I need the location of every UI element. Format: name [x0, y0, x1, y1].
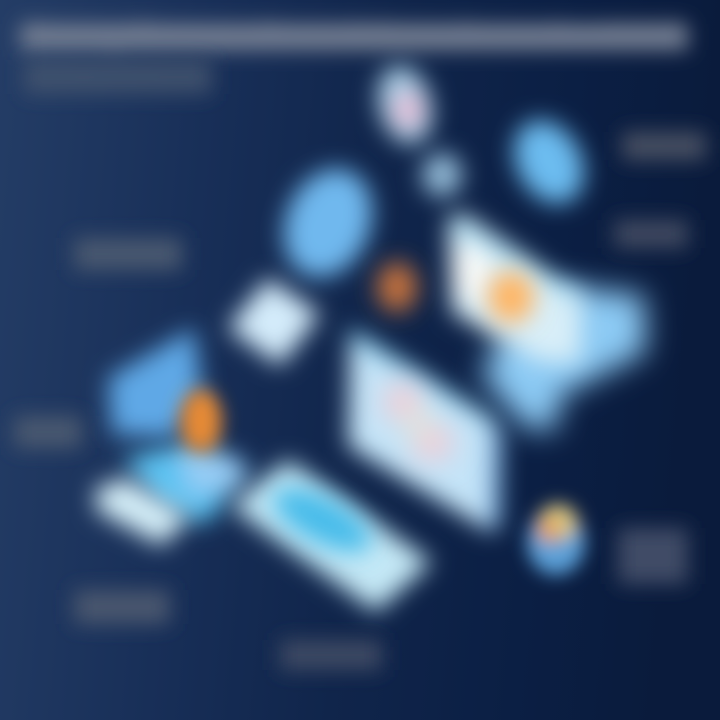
- icon: white rounded square: [228, 278, 320, 366]
- subtitle: Key security factors: [24, 70, 212, 91]
- label: upper right top: [622, 132, 706, 160]
- tablet chart marks: [386, 384, 451, 459]
- label: upper left: [74, 238, 182, 270]
- label: upper right bottom: Controls: [614, 224, 688, 244]
- label: left middle: Security: [14, 421, 82, 442]
- icon: bottom keyboard panel: [230, 460, 432, 612]
- panel: central tablet: [348, 328, 502, 534]
- label: right lower: Data: [618, 537, 689, 556]
- icon: blue leaf left: [108, 328, 202, 438]
- keyboard cyan centre: [264, 475, 380, 565]
- label: left middle: [14, 416, 82, 448]
- icon: orange dot: [377, 262, 417, 312]
- laptop orange mark: [488, 271, 534, 323]
- icon: large blue ellipse: [268, 155, 388, 291]
- icon: laptop upper right: [448, 214, 646, 430]
- laptop body: [124, 440, 250, 524]
- label: upper left: Regulations: [74, 243, 182, 264]
- label: right lower: Privacy: [618, 559, 689, 578]
- label: bottom centre: [280, 640, 382, 670]
- laptop screen: [448, 214, 582, 362]
- title: Compliance Considerations in AWS: [20, 16, 688, 55]
- orange lock: [180, 389, 222, 453]
- icon: upper right ellipse: [500, 108, 598, 216]
- laptop base: [482, 285, 646, 430]
- label: upper right top: Auditing: [622, 136, 706, 156]
- icon: laptop left: [96, 389, 250, 546]
- label: upper right bottom: [614, 220, 688, 248]
- label: right lower: [618, 528, 689, 584]
- icon: small bubble: [422, 153, 462, 197]
- label: bottom left: Frameworks: [74, 596, 170, 617]
- subtitle: [24, 60, 212, 94]
- label: bottom left: [74, 590, 170, 624]
- icon: bottom right badge: [527, 504, 585, 575]
- laptop keys: [96, 478, 190, 546]
- label: bottom centre: Monitoring: [280, 644, 382, 664]
- icon: top balloon: [370, 60, 440, 150]
